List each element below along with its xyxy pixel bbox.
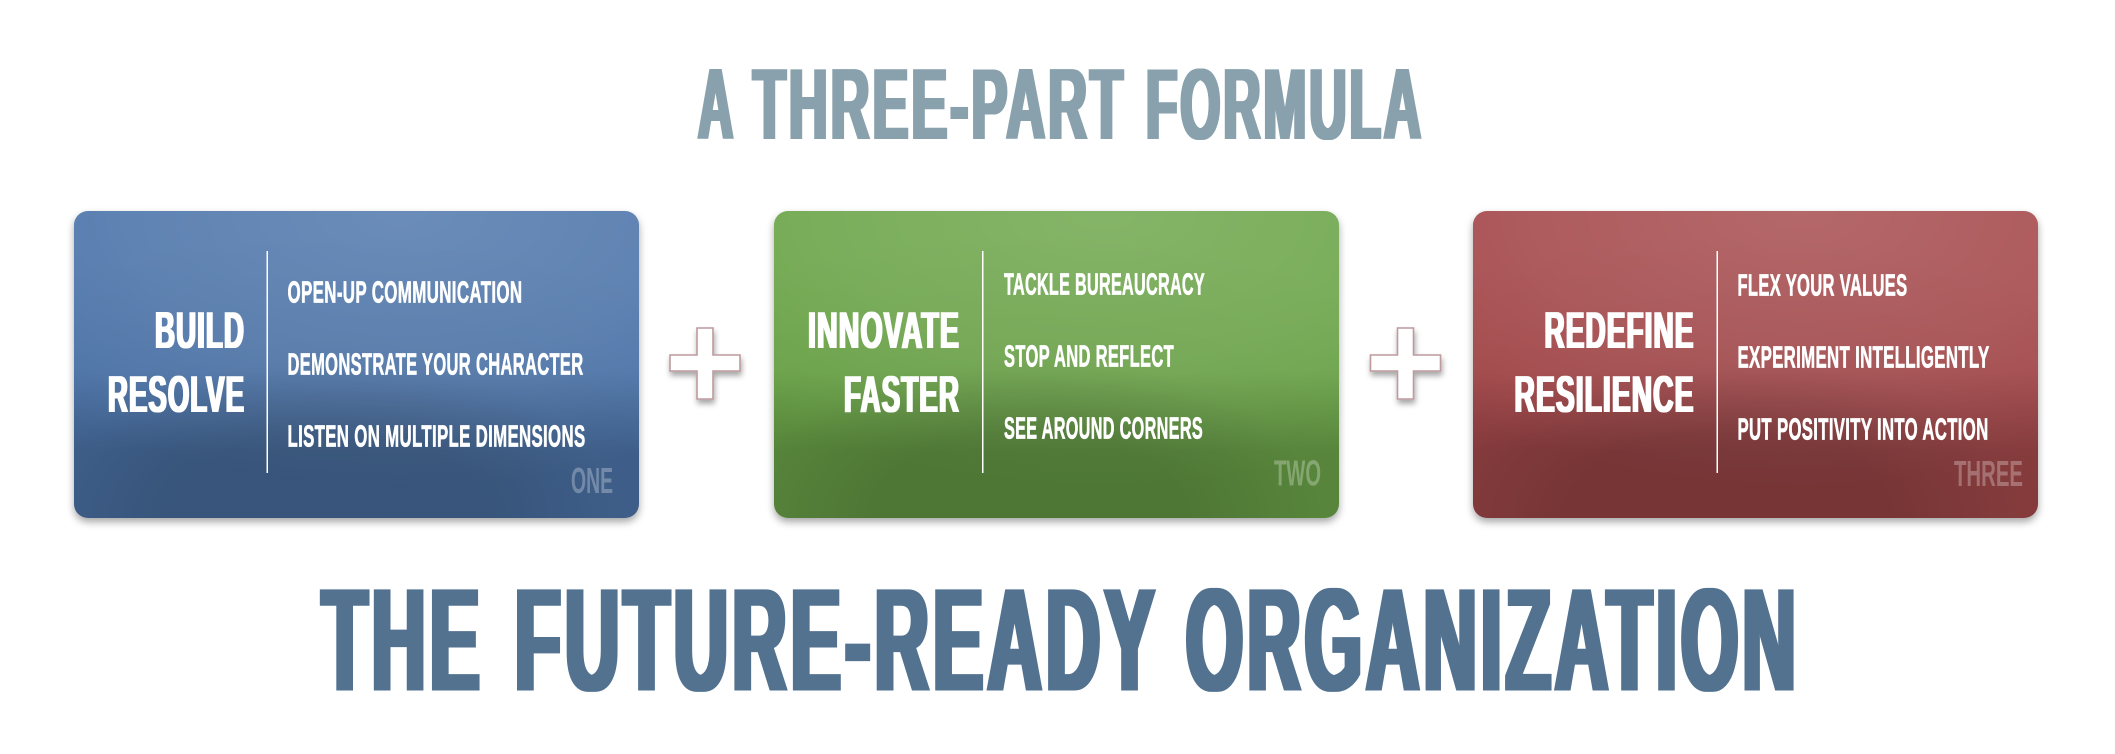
list: card two items: TACKLE BUREAUCRACY [1004,268,1205,302]
number label: three: THREE [1954,453,2023,494]
panel: card three, redefine resilience [1473,211,2038,518]
title: a three-part formula: FORMULA [1146,49,1424,161]
number label: one: ONE [571,460,613,501]
heading: redefine resilience: RESILIENCE [1514,366,1694,424]
heading: redefine resilience: REDEFINE [1544,302,1694,360]
icon: plus two [1370,328,1440,399]
list: card three items: FLEX YOUR VALUES [1738,268,1908,302]
heading: redefine resilience [1514,302,1694,424]
list: card one items: OPEN-UP COMMUNICATION [288,276,522,310]
icon: plus one [670,328,740,399]
title: a three-part formula: THREE-PART [753,49,1126,161]
number label: two: TWO [1274,452,1321,494]
panel: card two, innovate faster [774,211,1339,518]
heading: innovate faster: INNOVATE [808,302,960,360]
heading: build resolve: RESOLVE [108,366,245,424]
heading: innovate faster: FASTER [844,366,960,424]
list: card three items [1738,268,1990,446]
list: card two items: SEE AROUND CORNERS [1004,412,1203,446]
panel: card one, build resolve [74,211,639,518]
heading: build resolve [108,302,245,424]
title: the future-ready organization: THE [322,558,484,722]
title: the future-ready organization: FUTURE-READY [515,558,1159,722]
list: card one items: LISTEN ON MULTIPLE DIMENSIONS [288,420,586,454]
list: card two items [1004,268,1205,446]
list: card one items [288,276,586,454]
heading: build resolve: BUILD [155,302,245,360]
list: card two items: STOP AND REFLECT [1004,340,1174,374]
title: a three-part formula: A [698,49,736,161]
heading: innovate faster [808,302,960,424]
list: card one items: DEMONSTRATE YOUR CHARACTER [288,348,584,382]
